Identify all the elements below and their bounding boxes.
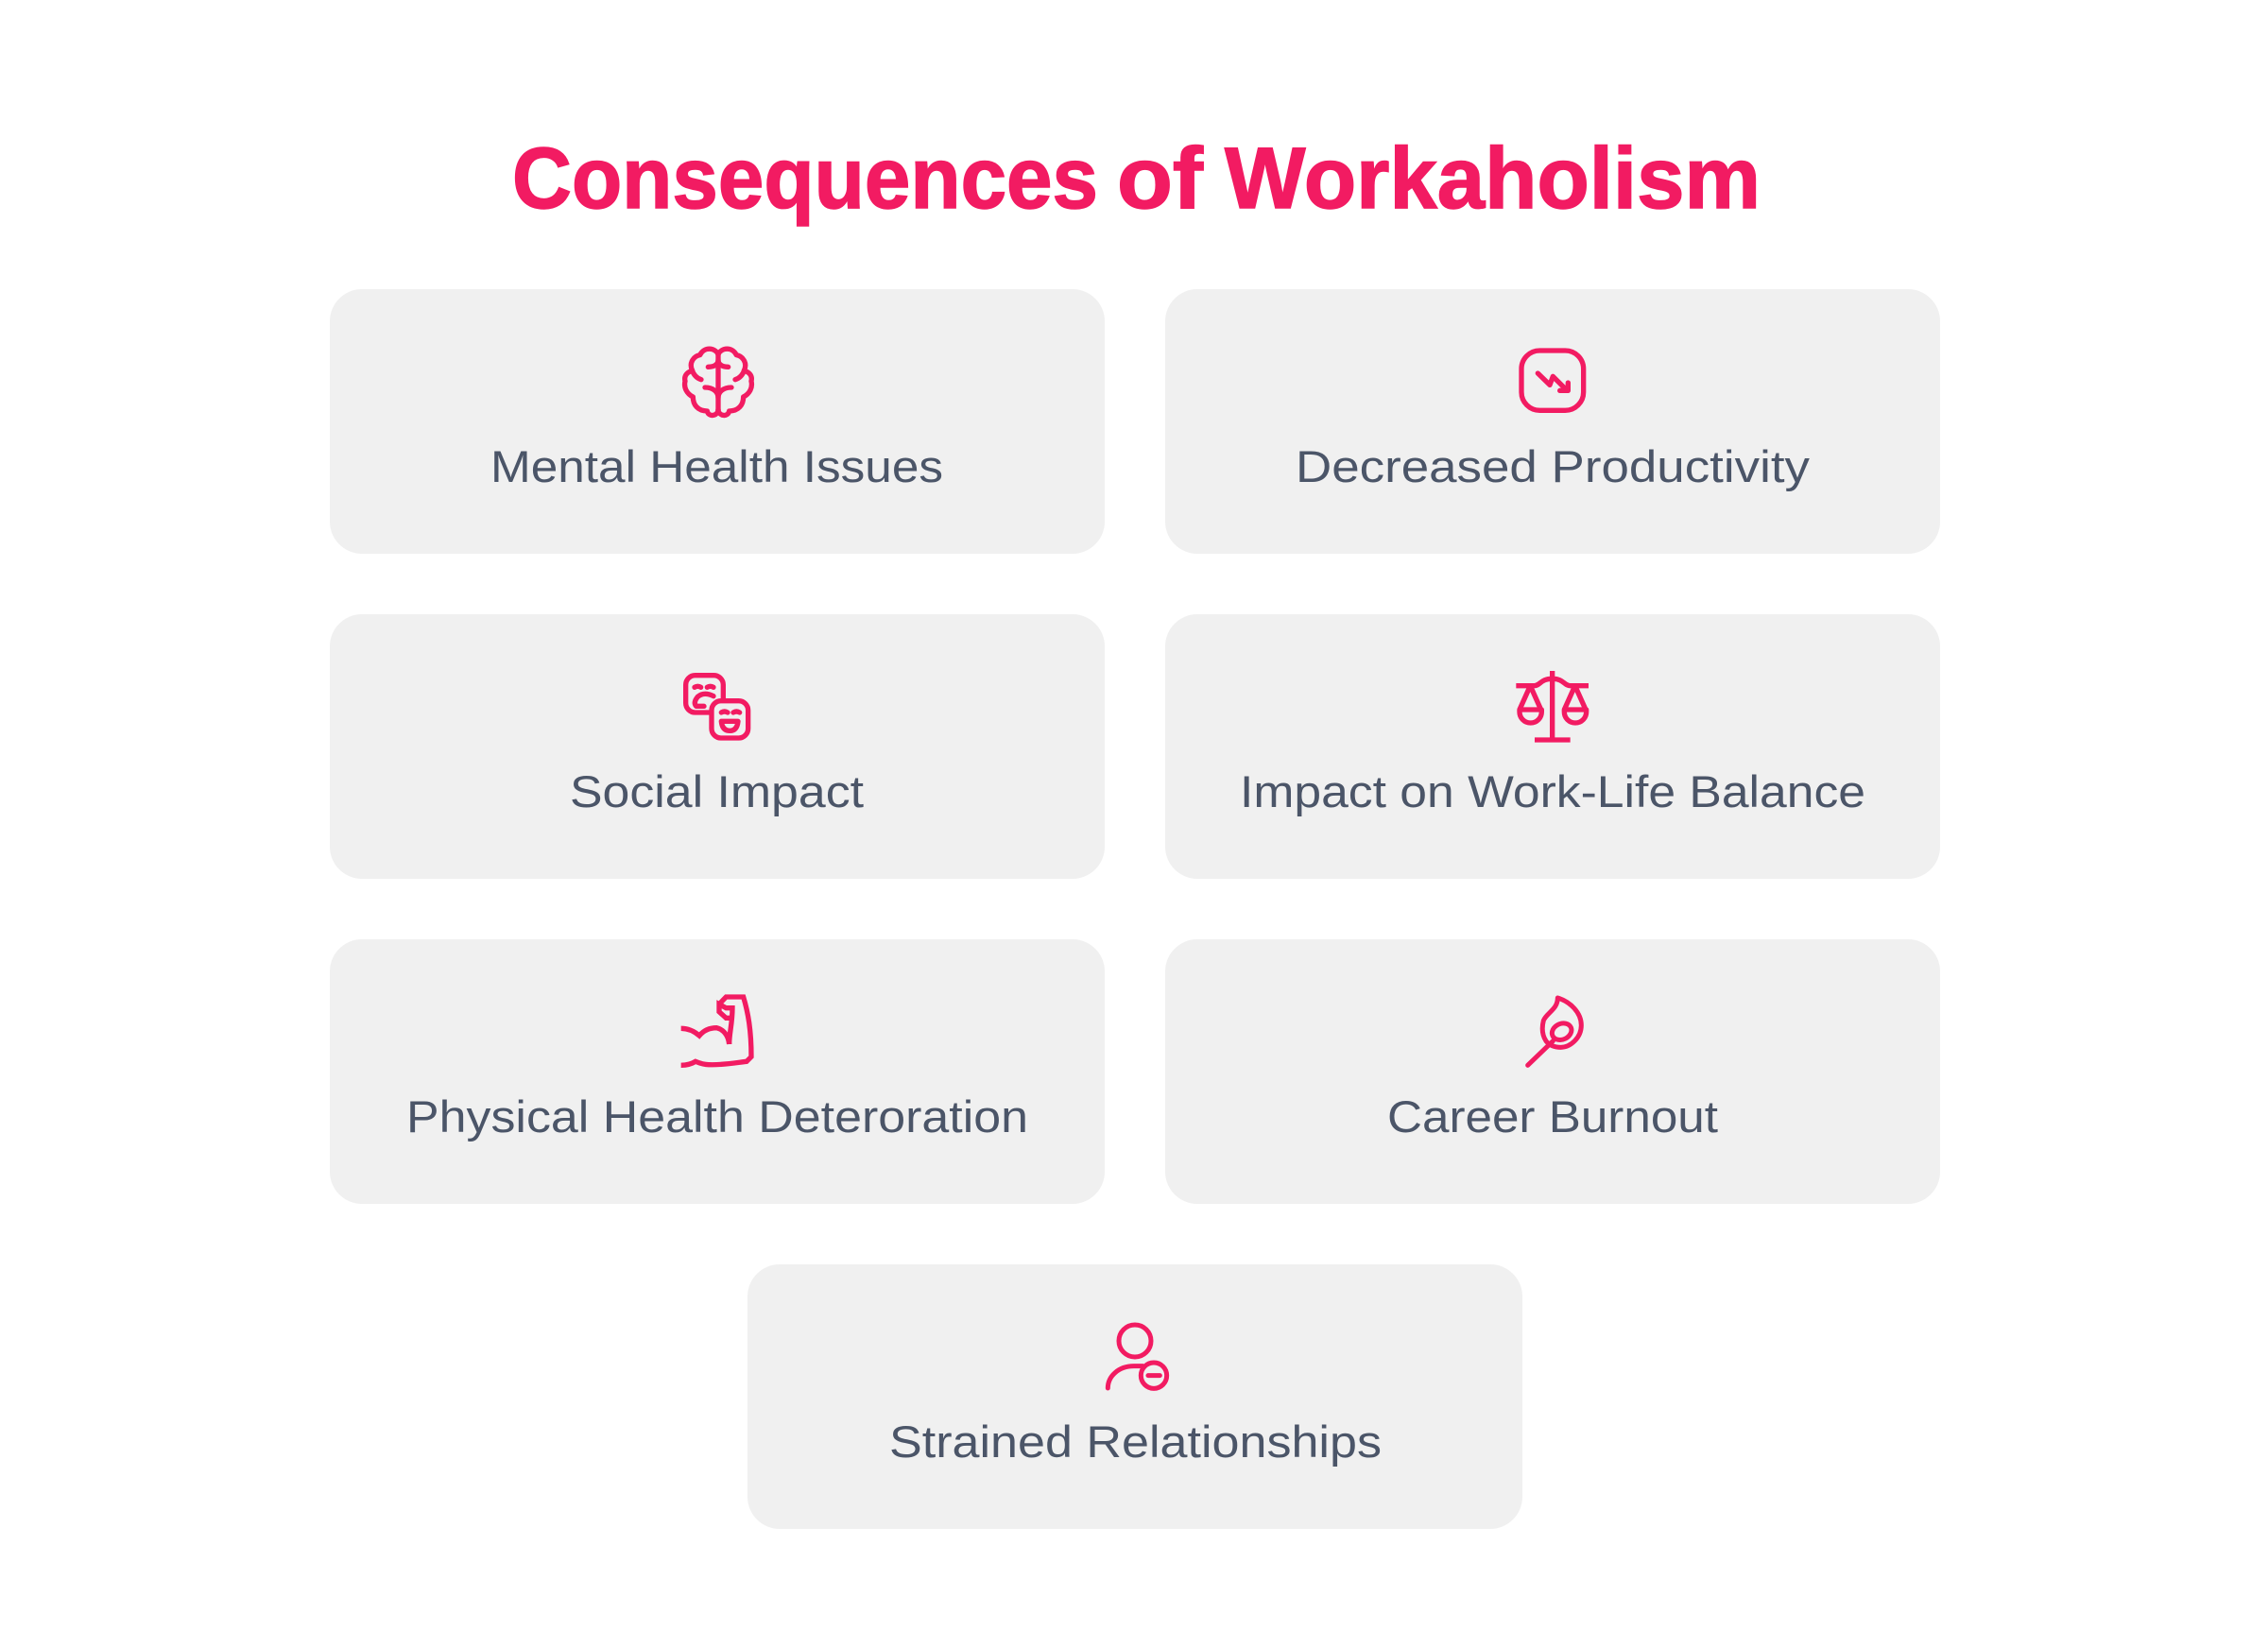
icon: brain	[685, 349, 751, 416]
label: impact on work-life balance: Impact on Work-Life Balance	[1240, 766, 1865, 816]
icon: sad and happy masks	[686, 676, 748, 738]
panel: career burnout	[1165, 939, 1940, 1204]
panel: impact on work-life balance	[1165, 614, 1940, 879]
icon: person with minus	[1108, 1325, 1167, 1388]
title: Workaholism	[1225, 130, 1761, 227]
label: mental health issues: Mental Health Issues	[490, 441, 943, 491]
label: strained relationships: Strained Relationships	[889, 1416, 1382, 1467]
panel: physical health deterioration	[330, 939, 1105, 1204]
label: social impact: Social Impact	[570, 766, 864, 816]
icon: flexed arm	[681, 997, 751, 1065]
panel: mental health issues	[330, 289, 1105, 554]
panel: strained relationships	[747, 1264, 1522, 1529]
label: career burnout: Career Burnout	[1387, 1091, 1718, 1142]
title	[512, 130, 1761, 227]
panel: social impact	[330, 614, 1105, 879]
label: physical health deterioration: Physical Health Deteroration	[406, 1091, 1028, 1142]
icon: burning match	[1528, 998, 1581, 1065]
title: Consequences	[512, 130, 1098, 227]
icon: falling chart	[1521, 351, 1584, 410]
label: decreased productivity: Decreased Productivity	[1296, 441, 1811, 491]
panel: decreased productivity	[1165, 289, 1940, 554]
icon: balance scale	[1516, 671, 1589, 742]
title: of	[1117, 130, 1203, 227]
